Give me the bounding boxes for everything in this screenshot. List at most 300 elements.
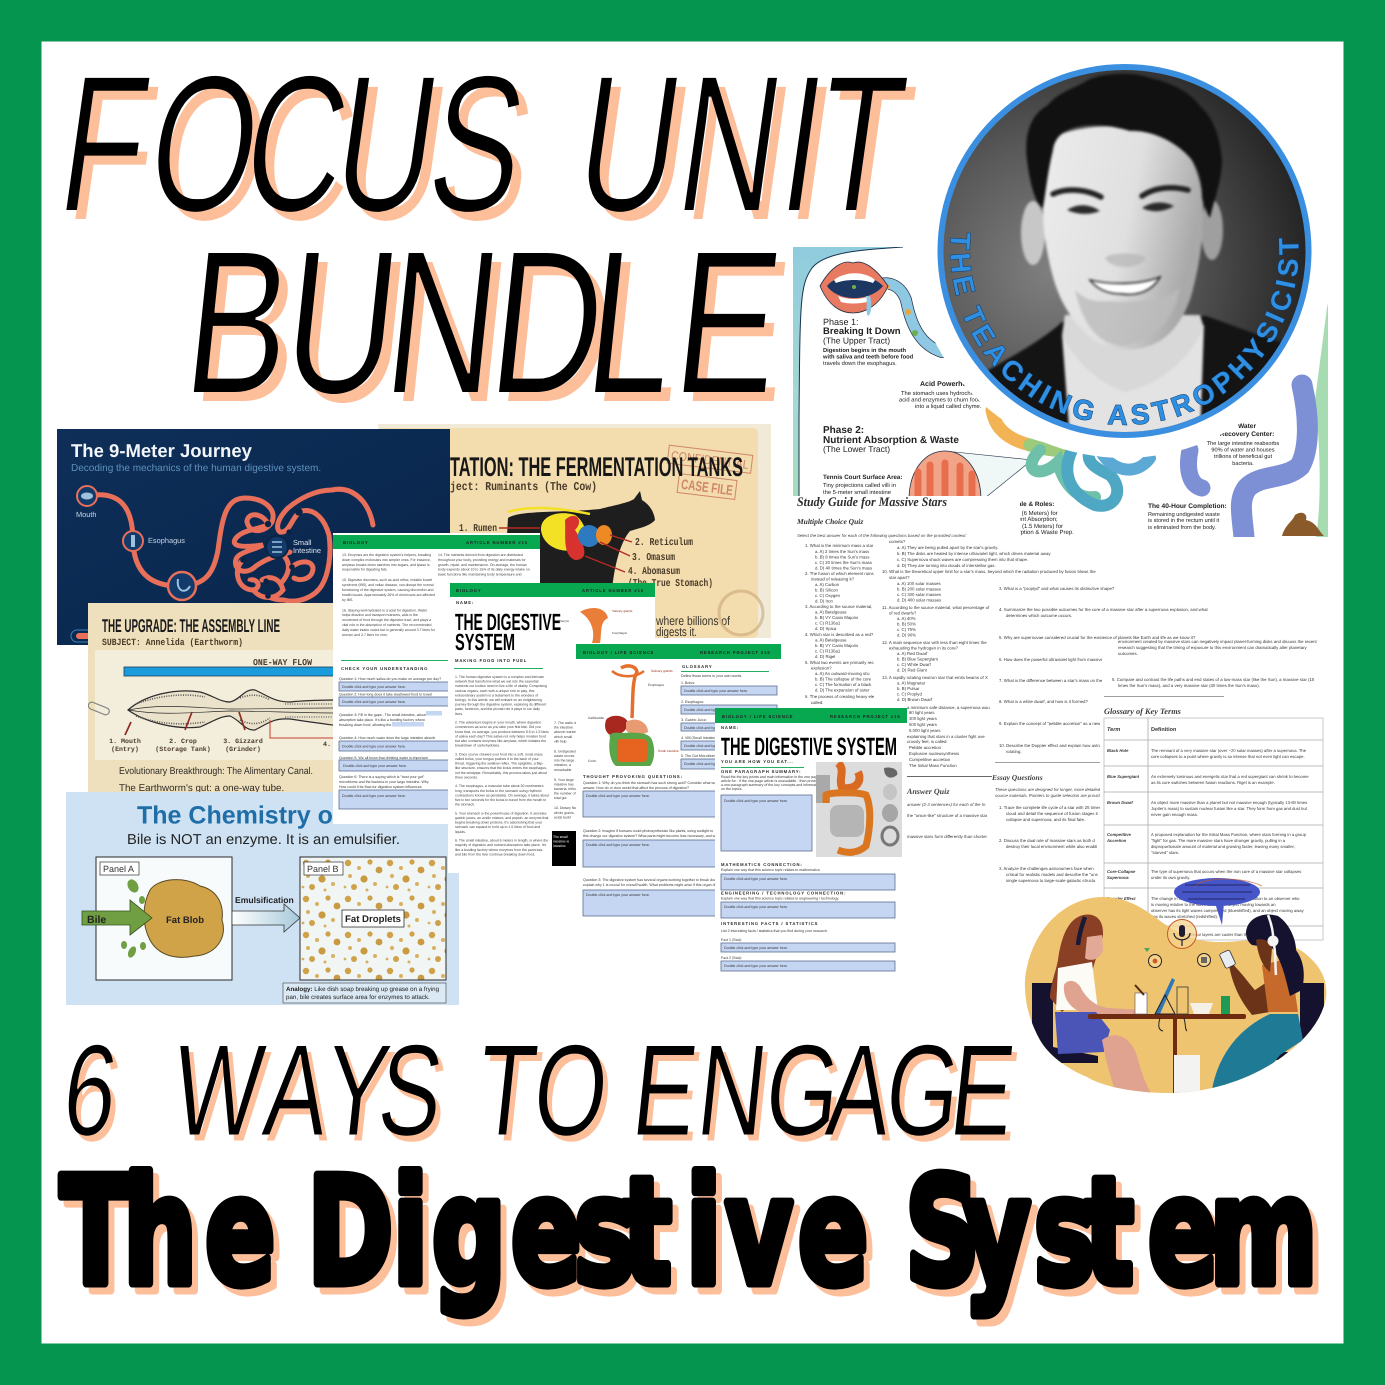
essay 4 and 5: outcomes. xyxy=(1118,651,1138,656)
assembly line title: THE UPGRADE: THE ASSEMBLY LINE xyxy=(102,615,280,636)
article 2 side column: intestine is xyxy=(553,840,569,844)
quiz column 1: called: xyxy=(811,700,823,705)
article 2 side column: whole grains, xyxy=(554,811,575,815)
icon: head diagram: Esophagus xyxy=(612,631,628,635)
panel: research project worksheet 1 xyxy=(576,644,781,919)
quiz column 2 lower: Competitive accretion xyxy=(909,757,951,762)
case file stamps: CASE FILE xyxy=(680,476,734,498)
water recovery text: Recovery Center: xyxy=(1220,431,1274,438)
journey title: The 9-Meter Journey xyxy=(71,440,253,461)
article 2 body text: and bile from the liver continue breaking down food, xyxy=(455,852,535,856)
quiz column 2 lower: explaining that stars in a cluster fight ove xyxy=(907,734,985,739)
image: digestive organs xyxy=(816,762,902,857)
project 2 green header: BIOLOGY / LIFE SCIENCE xyxy=(722,714,793,719)
glossary section: 3. Gastric Juice: xyxy=(681,718,707,722)
fermentation caption xyxy=(656,616,730,638)
thought provoking questions: Double click and type your answer here. xyxy=(586,843,650,847)
essay questions column: 1. Trace the complete life cycle of a star with 25 times the xyxy=(999,805,1109,810)
phase 2 text: Phase 2: xyxy=(823,425,864,436)
one paragraph summary: a one-paragraph summary of the key concepts and information xyxy=(721,783,821,787)
quiz column 2 lower: Pebble accretion xyxy=(909,745,942,750)
glossary table: core collapses to a point where gravity is so intense that not even light can escape. xyxy=(1151,754,1305,759)
phase 2 text: Tennis Court Surface Area: xyxy=(823,474,902,481)
quiz column 2 lower: Explosive nucleosynthesis xyxy=(909,751,959,756)
scale and roles text: Large (1.5 Meters) for xyxy=(1005,523,1063,530)
quiz column 1 xyxy=(805,543,875,705)
check your understanding: Double click and type your answer here. xyxy=(342,794,406,798)
panel: assembly line worksheet xyxy=(87,603,340,794)
glossary table: Accretion xyxy=(1106,838,1127,843)
photo xyxy=(985,74,1290,450)
phase 1 text: travels down the esophagus. xyxy=(823,360,897,367)
quiz column 2: d. D) 400 solar masses xyxy=(897,598,941,602)
quiz column 1: 2. The fusion of which element ruins xyxy=(805,571,874,576)
icon: digestive system diagram: Esophagus xyxy=(648,683,664,687)
title: The Digestive System: The Digestive System xyxy=(60,1146,1318,1318)
quiz column 2 lower: a. A) Magnetar xyxy=(897,680,926,686)
panel: assembly line worksheet: The Earthworm's gut: a one-way tube. xyxy=(119,783,284,794)
smile xyxy=(1090,277,1160,294)
check your understanding: breaking down food, allowing the xyxy=(339,723,391,727)
thought provoking questions: Double click and type your answer here. xyxy=(586,794,650,798)
chemistry subtitle: Bile is NOT an enzyme. It is an emulsifier. xyxy=(127,832,400,848)
glossary table: The type of supernova that occurs when the iron core of a massive star collapses xyxy=(1151,869,1301,874)
article 2 body text: like structure, ensures that the bolus enters the esophagus, xyxy=(455,766,547,770)
article 2 body text: lives. xyxy=(455,712,463,716)
quiz column 2: a. A) 100 solar masses xyxy=(897,581,941,586)
panel A: Panel A xyxy=(103,864,134,874)
glossary section: Double click and type your answer here. xyxy=(684,689,748,693)
quiz column 1: c. C) R136a1 xyxy=(815,648,841,654)
connection sections xyxy=(721,862,895,971)
essay questions column: collapse and supernova, and its final fate. xyxy=(1006,817,1085,822)
essay questions column xyxy=(995,658,1102,849)
icon: fat blob xyxy=(144,880,223,957)
one paragraph summary: Read the the key points and main information in the one page xyxy=(721,775,819,779)
quiz column 1: c. C) R136a1 xyxy=(815,620,841,626)
quiz column 1: instead of releasing it? xyxy=(811,576,855,582)
article 2 title: SYSTEM xyxy=(455,629,515,655)
40-hour completion text: The 40-Hour Completion: xyxy=(1148,503,1227,510)
table xyxy=(1088,1014,1246,1099)
worm labels: (Storage Tank) xyxy=(155,746,211,753)
article 2 body text: journey through the digestive system, exploring its different xyxy=(454,703,546,707)
laptop, cup, bowl and bottle xyxy=(1135,978,1230,1014)
check your understanding: Question 1: How much saliva do you make on average per day? xyxy=(339,677,441,681)
quiz column 2 lower: 11. According to the source material, what percentage of xyxy=(882,605,990,610)
neck xyxy=(1062,315,1204,392)
one paragraph summary: article for - if the one-page article is unavailable - then provide xyxy=(721,779,819,783)
one paragraph summary: Double click and type your answer here. xyxy=(724,799,788,803)
article 2 side column: total gut xyxy=(554,796,566,800)
glossary table: Glossary of Key Terms xyxy=(1104,707,1181,716)
quiz column 2 lower: c. C) Proplyd xyxy=(897,692,922,696)
phase 2 text: the 5-meter small intestine xyxy=(823,489,891,496)
glossary table: The remnant of a very massive star (over ~20 solar masses) after a supernova. The xyxy=(1151,748,1307,753)
glossary section: 2. Esophagus: xyxy=(681,700,704,704)
glossary table: is moving relative to the wave source. An object moving towards an xyxy=(1151,902,1276,907)
icon: paperclip xyxy=(87,701,110,716)
scale and roles text: Absorption & Waste Prep. xyxy=(1005,529,1074,536)
short answer questions: determines which outcome occurs. xyxy=(1006,613,1072,618)
glossary section: Double click and type your answer here. xyxy=(684,762,748,766)
glossary table xyxy=(1100,697,1328,944)
case file stamps xyxy=(667,445,753,499)
face xyxy=(1043,126,1203,349)
article 2 body text: throat, triggering the swallow reflex. The epiglottis, a flap- xyxy=(455,762,544,766)
essay heading: Essay Questions xyxy=(991,773,1043,782)
glossary table: Blue Supergiant xyxy=(1107,774,1140,779)
article 2 green header: BIOLOGY xyxy=(456,588,482,593)
panel B: Fat Droplets xyxy=(345,914,401,925)
article column 1 text: syndrome (IBS), and celiac disease, can disrupt the normal xyxy=(342,583,434,587)
article column 1 text: 16. Staying well-hydrated is crucial for digestion. Water xyxy=(342,608,428,612)
emulsification arrow xyxy=(232,895,300,932)
article 2 side column: 10. Dietary fiber xyxy=(554,806,580,810)
glossary table: Core-Collapse xyxy=(1107,869,1136,874)
icon: digestive system diagram: Salivary glands xyxy=(651,669,673,673)
short answer questions: 5. Why are supernovae considered crucial for the existence of planets like Earth and life as we know it? xyxy=(999,635,1196,640)
thought provoking questions: Question 3: The digestive system has several organs working together to break down xyxy=(583,878,719,882)
icon: head diagram: Pharynx xyxy=(558,619,570,623)
quiz column 2: a. A) They are being pulled apart by the star's gravity. xyxy=(897,545,998,550)
coffee ring xyxy=(719,591,763,635)
quiz column 2 lower: d. D) Brown Dwarf xyxy=(897,697,933,702)
left woman body xyxy=(1050,914,1152,1095)
essay 4 and 5: environment created by massive stars can negatively impact planet-forming disks and discuss the recent xyxy=(1118,639,1318,644)
author portrait badge xyxy=(938,64,1312,438)
icon: digestive system diagram: Colon xyxy=(588,759,597,763)
analogy callout: Analogy: Like dish soap breaking up grease on a frying xyxy=(286,986,440,993)
left chair xyxy=(1032,983,1098,1063)
essay 4 and 5: 5. Compare and contrast the life paths and end states of a low-mass star (like the Sun), a massive star (15 xyxy=(1112,677,1315,682)
quiz column 2 lower: Answer Quiz xyxy=(906,787,950,796)
article 2 side column: absorb nutrients xyxy=(554,730,579,734)
heading: BUNDLE: BUNDLE xyxy=(175,208,792,437)
article column 1 text: 13. Enzymes are the digestive system's helpers, breaking xyxy=(342,553,431,557)
right woman head xyxy=(1219,915,1304,996)
scale and roles text: Small (6 Meters) for xyxy=(1005,510,1058,517)
icon: mouth station xyxy=(77,486,97,506)
panel B xyxy=(300,857,446,980)
connection sections: Double click and type your answer here. xyxy=(724,964,788,968)
check your understanding: CHECK YOUR UNDERSTANDING xyxy=(341,666,428,671)
essay questions column: 9. Explain the concept of "pebble accretion" as a new model xyxy=(999,721,1113,726)
article 2 side column: intestine, a xyxy=(554,763,571,767)
phase 2 text: Tiny projections called villi in xyxy=(823,482,896,489)
quiz column 1: d. D) Iron xyxy=(815,598,834,604)
circle: white halo xyxy=(912,34,1336,458)
article 2 side column: intestine xyxy=(553,844,566,848)
acid text: The stomach uses hydrochloric xyxy=(901,390,981,397)
project green header: BIOLOGY / LIFE SCIENCE xyxy=(583,650,654,655)
quiz column 2 lower: the "onion-like" structure of a massive star xyxy=(907,813,988,818)
fermentation caption: where billions of xyxy=(655,614,730,628)
nose shadow xyxy=(1105,254,1146,267)
connection sections: Double click and type your answer here. xyxy=(724,905,788,909)
icon: large intestine xyxy=(1188,385,1307,537)
article 2 body text: like a bustling factory where enzymes from the pancreas xyxy=(455,848,543,852)
connection sections: Explain one way that this science topic relates to engineering / technology. xyxy=(721,896,839,900)
connection sections: Explain one way that this science topic relates to mathematics. xyxy=(721,868,821,872)
one paragraph summary: on the topics. xyxy=(721,787,742,791)
connection sections: List 2 interesting facts / statistics that you find during your research. xyxy=(721,929,828,933)
quiz column 1: 6. The process of creating heavy ele xyxy=(805,694,875,699)
quiz column 1: c. C) Oxygen xyxy=(815,593,841,598)
project green header xyxy=(576,644,781,659)
article column 2 text: body expends about 10 to 15% of its daily energy intake on xyxy=(438,568,530,572)
quiz column 2 lower: massive stars form differently than shorter xyxy=(907,834,987,839)
panel: study guide document: critical for realistic models and describe the "uns xyxy=(1006,872,1098,877)
quiz column 2: comets? xyxy=(889,539,906,544)
essay questions column: rotating. xyxy=(1006,749,1022,754)
one-way flow bar xyxy=(124,667,336,676)
short answer questions: 4. Summarize the two possible outcomes for the core of a massive star after a supernova explosion, and what xyxy=(999,607,1209,612)
quiz column 1: 4. Which star is described as a red? xyxy=(805,632,874,637)
quiz column 2 xyxy=(882,539,1096,602)
check your understanding: Question 6: There is a saying which is "trust your gut" xyxy=(339,775,425,779)
quiz column 1: 1. What is the minimum mass a star xyxy=(805,543,874,548)
glossary table: "starved" stars. xyxy=(1151,850,1179,855)
fermentation subject: ject: Ruminants (The Cow) xyxy=(450,480,597,494)
icon: digestive system diagram: Gallbladder xyxy=(588,716,605,720)
glossary table: has its waves stretched (redshifted). xyxy=(1151,914,1218,919)
cow labels xyxy=(459,523,713,590)
check your understanding: Question 3: Fill in the gaps - The small intestine, about xyxy=(339,713,426,717)
thought provoking questions: explain why 1 is crucial for overall health. What problems might arise if this organ did xyxy=(583,883,717,887)
icon: digestive system diagram: Small intestine xyxy=(658,749,679,753)
glossary table: A proposed explanation for the Initial Mass Function, where stars forming in a group xyxy=(1151,832,1307,837)
glossary table: An object more massive than a planet but not massive enough (typically 13-80 times xyxy=(1151,800,1307,805)
article 2 green header: ARTICLE NUMBER #15 xyxy=(582,588,644,593)
article 2 body text: biology. In this article, we will embark on an enlightening xyxy=(455,698,542,702)
phase 2 text: (The Lower Tract) xyxy=(823,444,890,454)
cow labels: 4. Abomasum xyxy=(628,566,680,578)
quiz column 1: b. B) VY Canis Majoris xyxy=(815,643,858,648)
quiz column 1: explosion? xyxy=(811,666,832,670)
quiz column 2 lower: c. C) White Dwarf xyxy=(897,662,931,667)
worm labels: 2. Crop xyxy=(169,738,197,745)
quiz column 2 lower: b. B) Blue Supergiant xyxy=(897,656,939,662)
glossary table: An extremely luminous and energetic star that a red supergiant can shrink to become xyxy=(1151,774,1309,779)
phase 1 text: (The Upper Tract) xyxy=(823,336,890,346)
glossary table: Black Hole xyxy=(1107,748,1129,753)
check your understanding xyxy=(339,660,449,809)
article column 1 text: health issues. Approximately 20% of Americans are affected xyxy=(342,593,435,597)
thought provoking questions: this change our digestive system? What parts might become less necessary, and what xyxy=(583,834,720,838)
article 2 side column: remarkable xyxy=(554,768,572,772)
quiz column 1: 5. What two events are primarily res xyxy=(805,660,874,665)
check your understanding: Double click and type your answer here. xyxy=(342,744,406,748)
glossary section: Double click and type your answer here. xyxy=(684,744,748,748)
quiz column 1: a. A) 2 times the Sun's mass xyxy=(815,549,869,554)
40-hour completion text: is eliminated from the body. xyxy=(1148,524,1216,531)
heading: FOCUS UNIT: FOCUS UNIT xyxy=(48,35,917,253)
check your understanding: Double click and type your answer here. xyxy=(342,700,406,704)
scale and roles text: Scale & Roles: xyxy=(1010,501,1054,508)
quiz column 2 lower: exhausting the hydrogen in its core? xyxy=(889,646,959,650)
connection sections: MATHEMATICS CONNECTION: xyxy=(721,862,803,867)
icon: mouth xyxy=(820,262,888,316)
article 2 body text: 2. The adventure begins in your mouth, where digestion xyxy=(455,721,541,725)
analogy callout xyxy=(283,983,446,1003)
icon: small intestine station xyxy=(266,536,288,558)
check your understanding: Double click and type your answer here. xyxy=(343,764,407,768)
article 2 body text: five to ten seconds for the bolus to travel from the mouth to xyxy=(455,798,546,802)
speech bubble xyxy=(1174,878,1262,925)
quiz column 2: d. D) They are turning into clouds of interstellar gas. xyxy=(897,563,996,568)
article 2 body text: contractions known as peristalsis. On average, it takes about xyxy=(455,793,549,797)
quiz column 2: b. B) The disks are heated by intense ultraviolet light, which drives material away xyxy=(897,551,1051,556)
acid text: Acid Powerhouse xyxy=(920,380,979,388)
phase 2 text xyxy=(823,425,959,496)
quiz column 2 lower: a minimum safe distance, a supernova wou xyxy=(907,705,990,710)
evolutionary caption: Evolutionary Breakthrough: The Alimentary Canal. xyxy=(119,766,313,777)
quiz column 1: d. D) Rigel xyxy=(815,654,835,659)
article 2 body text: long, transports the bolus to the stomach using rhythmic xyxy=(455,789,542,793)
ears xyxy=(1021,201,1045,265)
article 2 body text: majority of digestion and nutrient absorption take place. It's xyxy=(455,843,546,847)
article 2 body text: called bolus, your tongue pushes it to the back of your xyxy=(455,757,539,761)
40-hour completion text: is stored in the rectum until it xyxy=(1148,517,1220,524)
panel: article worksheet 2: MAKING FOOD INTO FUEL xyxy=(455,658,527,663)
worm labels: (Entry) xyxy=(111,746,139,753)
one-way flow label: ONE-WAY FLOW xyxy=(253,658,313,668)
water recovery text: Water xyxy=(1238,423,1256,430)
article column 1 text: responsible for digesting fats. xyxy=(342,568,388,572)
glossary section: GLOSSARY xyxy=(682,664,713,669)
article 2 body text: extraordinary system is a testament to the wonders of xyxy=(455,693,538,697)
quiz column 2: b. B) 200 solar masses xyxy=(897,586,941,592)
connection sections: Fact 1 (Stat): xyxy=(721,938,742,942)
journey subtitle: Decoding the mechanics of the human digestive system. xyxy=(71,463,321,474)
quiz column 1: c. C) The formation of a black xyxy=(815,682,872,687)
article column 1 text: down complex molecules into simpler ones. For instance, xyxy=(342,558,431,562)
glossary table: disproportionate amount of material and growing faster, leaving many smaller, xyxy=(1151,844,1295,849)
article column 1 text: vital role in the absorption of nutrients. The recommended xyxy=(342,623,431,627)
article green header xyxy=(333,535,540,549)
article column 1 text: functioning of the digestive system, causing discomfort and xyxy=(342,588,433,592)
icon: digestive system diagram xyxy=(588,666,679,766)
short answer questions: 3. What is a "proplyd" and what causes its distinctive shape? xyxy=(999,586,1115,591)
article 2 body text: breakdown of carbohydrates. xyxy=(455,744,500,748)
multiple choice heading: Multiple Choice Quiz xyxy=(796,517,863,526)
quiz column 2: 10. What is the theoretical upper limit for a star's mass, beyond which the radiation produced by fusion blows the xyxy=(882,569,1096,574)
article 2 side column: waste moves xyxy=(554,754,575,758)
article 2 body text: 6. The small intestine, about 6 meters in length, is where the xyxy=(455,839,548,843)
quiz column 2 lower: The Initial Mass Function xyxy=(909,763,957,768)
author portrait badge: THE TEACHING ASTROPHYSICIST xyxy=(950,232,1299,426)
article 2 side column: bacteria, trillions xyxy=(554,787,580,791)
glossary section xyxy=(681,664,777,769)
quiz column 2 lower: 300 light years xyxy=(909,716,937,721)
phase 2 text: Nutrient Absorption & Waste xyxy=(823,435,959,446)
article column 1 text: helps dissolve and transport nutrients, aids in the xyxy=(342,613,418,617)
essay questions column: 10. Describe the Doppler effect and explain how astronomers xyxy=(999,743,1115,748)
panel: study guide document xyxy=(793,494,1328,944)
article 2 side column: intestine has xyxy=(554,782,574,786)
right woman lower body xyxy=(1212,958,1303,1090)
one paragraph summary: ONE PARAGRAPH SUMMARY: xyxy=(721,769,801,774)
cow labels: 3. Omasum xyxy=(632,552,675,564)
panel: podcast illustration xyxy=(1020,878,1335,1100)
quiz column 2 lower: crossly feel, is called: xyxy=(907,739,948,744)
essay questions column: destroy their local environment while also enabli xyxy=(1006,844,1097,849)
acid text: acid and enzymes to churn food xyxy=(899,396,981,404)
esophagus label: Esophagus xyxy=(148,536,185,545)
glossary table: The change in frequency or wavelength of a wave in relation to an observer who xyxy=(1151,896,1300,901)
progress pill xyxy=(70,630,88,642)
right chair xyxy=(1257,983,1324,1060)
quiz column 2 lower: d. D) 90% xyxy=(897,632,916,638)
article column 2 text: growth, repair, and maintenance. On average, the human xyxy=(438,563,527,567)
article 2 green header xyxy=(450,583,655,597)
article 2 side column: villi help xyxy=(554,739,567,743)
cow labels: (The True Stomach) xyxy=(628,578,713,590)
article 2 body text: not the windpipe. Remarkably, this process takes just about xyxy=(455,771,547,775)
quiz column 2 lower: 5,000 light years xyxy=(909,728,941,733)
quiz column 2 lower: 600 light years xyxy=(909,722,937,727)
article 2 side column: The small xyxy=(553,835,568,839)
one paragraph summary xyxy=(721,769,821,851)
small intestine label: Intestine xyxy=(293,546,321,555)
thought provoking questions: Question 2: Imagine if humans could photosynthesize like plants, using sunlight to xyxy=(583,829,713,833)
icon: esophagus tube xyxy=(872,283,942,352)
article 2 body text: begins breaking down proteins. It's astonishing that your xyxy=(455,821,543,825)
worm labels: (Grinder) xyxy=(225,746,261,753)
panel: fermentation tanks case file xyxy=(378,424,771,639)
article 2 side column: which small xyxy=(554,735,572,739)
quiz column 2 lower: of red dwarfs? xyxy=(889,610,917,616)
glossary table: Supernova xyxy=(1107,875,1129,880)
phase 1 text: Digestion begins in the mouth xyxy=(823,347,907,354)
icon: stomach and small intestine xyxy=(992,410,1150,506)
glossary section: Double click and type your answer here. xyxy=(684,726,748,730)
quiz column 1: d. D) 40 times the Sun's mass xyxy=(815,566,872,570)
intestine nodes xyxy=(240,508,303,599)
eyes xyxy=(1067,202,1174,214)
glossary table: Doppler Effect xyxy=(1107,896,1136,901)
essay questions column: cloud and detail the sequence of fusion stages it xyxy=(1006,811,1099,816)
article green header: ARTICLE NUMBER #15 xyxy=(466,540,528,545)
fermentation caption: digests it. xyxy=(656,625,697,639)
icon: stomach station xyxy=(168,572,196,600)
emulsification arrow: Emulsification xyxy=(235,895,294,905)
article 2 body text: stomach can expand to hold up to 1.5 liters of food and xyxy=(455,825,540,829)
quiz column 2 lower: a. A) 40% xyxy=(897,616,916,621)
glossary section: 1. Bolus: xyxy=(681,681,695,685)
small intestine label: Small xyxy=(293,538,312,547)
essay questions column: 7. What is the difference between a star's mass on the main xyxy=(999,678,1113,683)
quiz column 2 lower: d. D) Red Giant xyxy=(897,668,928,672)
check your understanding: Double click and type your answer here. xyxy=(342,685,406,689)
stubble xyxy=(1075,288,1180,346)
worm labels xyxy=(109,712,333,753)
quiz column 2: c. C) Supernova shock waves are compressing them into that shape. xyxy=(897,557,1028,562)
thought provoking questions: THOUGHT PROVOKING QUESTIONS: xyxy=(583,774,683,779)
icon: bile arrow xyxy=(82,900,152,935)
article 2 body text: 3. Once you've chewed your food into a soft, moist mass xyxy=(455,752,543,756)
article 2 side column: 9. Your large xyxy=(554,778,574,782)
glossary section: 5. The Gut Microbiome: xyxy=(681,754,718,758)
article 2 side column: 8. Undigested xyxy=(554,749,576,753)
project 2 title: THE DIGESTIVE SYSTEM xyxy=(721,733,897,761)
article 2 body text: commences as soon as you take your first bite. Did you xyxy=(455,725,541,729)
suit xyxy=(985,316,1290,450)
article 2 side column xyxy=(552,721,580,866)
quiz column 2 lower: 80 light years xyxy=(909,710,935,715)
essay questions column: 2. Discuss the dual role of massive stars as both d xyxy=(999,838,1095,843)
